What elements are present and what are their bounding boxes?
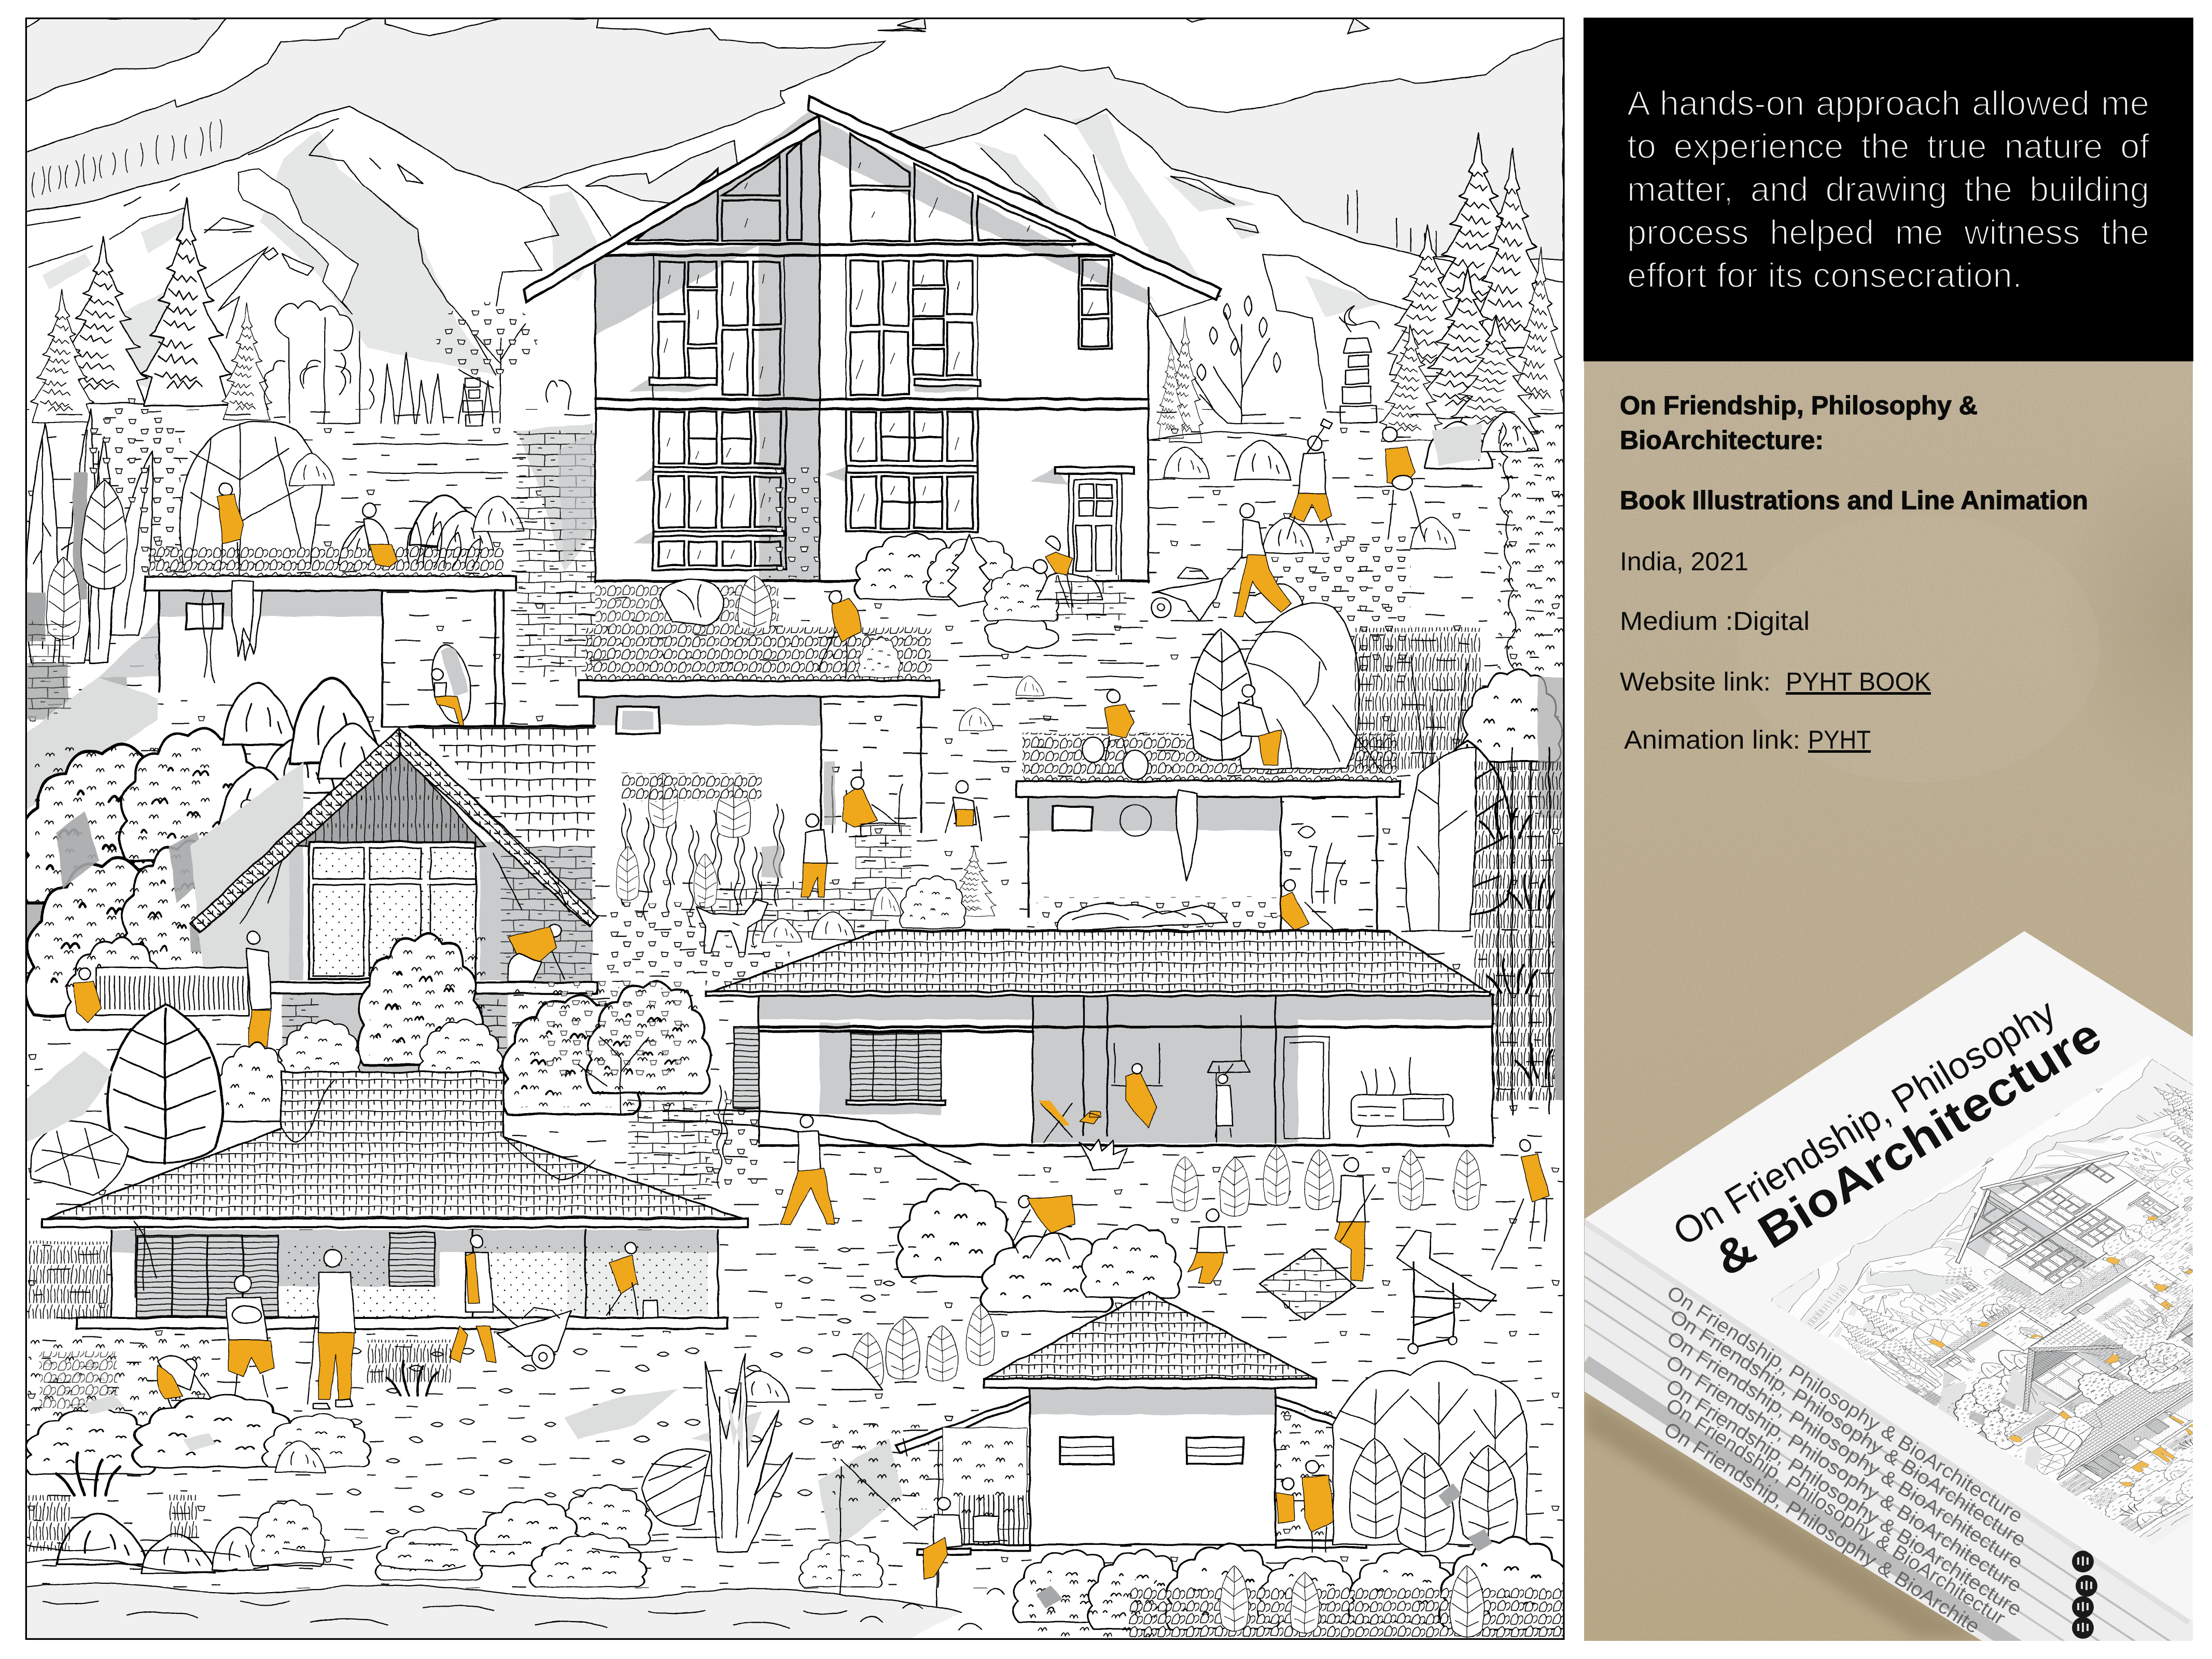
spine titles: On Friendship, Philosophy & BioArchite	[1660, 1418, 1983, 1638]
gardener bent	[1013, 1196, 1075, 1258]
spines	[1585, 1213, 2193, 1659]
chalet	[190, 726, 598, 1072]
workers in front yard	[158, 1250, 356, 1419]
website link: Website link:	[1620, 667, 1771, 696]
spine titles	[1660, 1282, 2029, 1638]
miniature cover illustration	[1711, 1032, 2212, 1550]
bamboo grove	[1474, 748, 1566, 1114]
kneeling bricklayer	[1188, 1210, 1227, 1284]
balcony railing with figures	[73, 932, 271, 1047]
foreground bottom right vegetation	[1013, 1529, 1573, 1639]
tv cabinet	[1351, 1058, 1453, 1137]
brick stack	[1260, 1250, 1356, 1320]
animation link target: PYHT	[1808, 725, 1871, 754]
shrubs at house front	[595, 466, 1126, 636]
water	[25, 1538, 1004, 1640]
lean-to left	[896, 1396, 1030, 1587]
gable windows	[636, 133, 1076, 241]
quote text	[1627, 84, 2149, 295]
building: center green-roof block	[578, 628, 940, 903]
mid-right garden with workers	[790, 1140, 1549, 1389]
dog	[697, 900, 767, 953]
big man with shovel	[307, 1250, 356, 1409]
figures at lower-left house	[449, 1235, 657, 1368]
figure: bamboo carrier	[663, 1110, 971, 1225]
wheelbarrow worker	[1151, 503, 1291, 621]
front yard foliage	[28, 1333, 452, 1417]
quote text: effort for its consecration.	[1627, 256, 2022, 295]
cover title: & BioArchitecture	[1705, 1008, 2110, 1286]
spine titles: On Friendship, Philosophy & BioArchitecture	[1666, 1305, 2029, 1551]
sky: cloud bands	[25, 18, 1563, 260]
shrubs in front of chalet	[215, 933, 502, 1121]
couple at cottage	[1277, 1460, 1335, 1552]
ground texture	[26, 409, 1564, 1588]
website link target: PYHT BOOK	[1786, 667, 1931, 696]
figure: person with spade on slope	[818, 591, 861, 677]
spine titles: On Friendship, Philosophy & BioArchitecture	[1662, 1351, 2025, 1597]
fan palms at lower right	[1333, 1361, 1527, 1552]
front yard ground	[339, 1333, 832, 1538]
spine titles: On Friendship, Philosophy & BioArchitecture	[1663, 1327, 2026, 1573]
cabbages and low plants	[790, 1241, 995, 1389]
figure: woman sitting at door	[1033, 536, 1073, 607]
foreground left bushes and rocks	[24, 1395, 371, 1573]
hillside: right terraces	[959, 413, 1563, 762]
quote text: matter, and drawing the building	[1627, 170, 2149, 209]
panel: quote background	[1584, 18, 2193, 361]
walls	[595, 247, 1149, 583]
panes white	[659, 261, 780, 344]
person at orange shirt among plants	[1082, 685, 1281, 779]
man with shovel	[1335, 1158, 1376, 1281]
cart	[1396, 1230, 1495, 1354]
figure: man with hammer	[1286, 419, 1333, 540]
figure: person carrying on upper left	[217, 483, 243, 571]
big round leaves	[25, 1004, 222, 1194]
shower and room	[1216, 1016, 1241, 1143]
animation link: Animation link:	[1624, 725, 1800, 754]
cover title: On Friendship, Philosophy	[1666, 991, 2063, 1254]
spine titles: On Friendship, Philosophy & BioArchitecture	[1663, 1282, 2026, 1527]
bent gardener	[158, 1356, 220, 1419]
middle terrace with vines and steps	[607, 773, 996, 973]
panel: illustration	[14, 7, 1580, 1657]
building: left green-roof studio	[99, 522, 516, 730]
forest: right conifers and trees	[1157, 134, 1567, 442]
mid floor windows	[653, 409, 977, 570]
long house, right	[705, 931, 1493, 1145]
foreground centre palm and plants	[375, 1354, 973, 1587]
spine titles: On Friendship, Philosophy & BioArchitecture	[1662, 1375, 2025, 1621]
book cover	[1585, 931, 2193, 1622]
climbing figure	[1493, 1140, 1549, 1270]
publisher logos on spines	[2072, 1551, 2097, 1639]
upper windows	[659, 257, 1112, 395]
figure: man carrying stone	[1382, 427, 1425, 539]
quote text: process helped me witness the	[1627, 213, 2149, 252]
title line 1: On Friendship, Philosophy &	[1620, 391, 1978, 420]
illustration frame	[26, 18, 1564, 1639]
project details text	[1620, 391, 2088, 754]
lower left house	[28, 1072, 748, 1329]
quote text: A hands-on approach allowed me	[1627, 84, 2149, 123]
wall outlines	[595, 119, 1149, 583]
shadow shapes	[595, 111, 1149, 581]
figure: climber on ladder	[231, 800, 282, 863]
book stack mockup	[1585, 931, 2212, 1659]
medium: Medium :Digital	[1620, 607, 1810, 636]
subtitle: Book Illustrations and Line Animation	[1620, 486, 2088, 515]
mountains	[25, 106, 1563, 409]
figures on the stairs	[801, 777, 982, 897]
roof	[524, 116, 820, 301]
hillside: left terrace plants	[25, 398, 595, 677]
glass ticks	[664, 162, 1094, 558]
door	[1055, 467, 1134, 581]
figure: kneeling worker on chalet balcony	[508, 924, 564, 982]
panel: beige textured backdrop	[1584, 361, 2212, 1641]
lean-to right	[1276, 1396, 1401, 1548]
left foliage mass	[19, 621, 391, 1030]
table shadow	[1585, 1395, 1982, 1638]
place and year: India, 2021	[1620, 547, 1748, 576]
bushes and tree centre	[501, 980, 762, 1199]
front yard stones	[339, 1333, 832, 1538]
spine titles: On Friendship, Philosophy & BioArchitectur	[1662, 1394, 2009, 1629]
person holding bowl	[226, 1275, 274, 1396]
hanging chair with person	[427, 642, 477, 730]
door	[1284, 1037, 1329, 1138]
forest: left conifers and trees	[31, 198, 571, 426]
green roof slab	[145, 576, 516, 591]
small cottage	[896, 1292, 1401, 1587]
main house	[524, 96, 1221, 583]
quote text: to experience the true nature of	[1627, 127, 2149, 166]
stone pile near dog	[705, 912, 856, 987]
big leaf plants at right slope	[1191, 603, 1563, 931]
building: right green-roof block	[1016, 734, 1400, 932]
figure: gardener crouching left	[347, 503, 398, 567]
fisher on post	[841, 1460, 999, 1619]
title line 2: BioArchitecture:	[1620, 426, 1824, 455]
